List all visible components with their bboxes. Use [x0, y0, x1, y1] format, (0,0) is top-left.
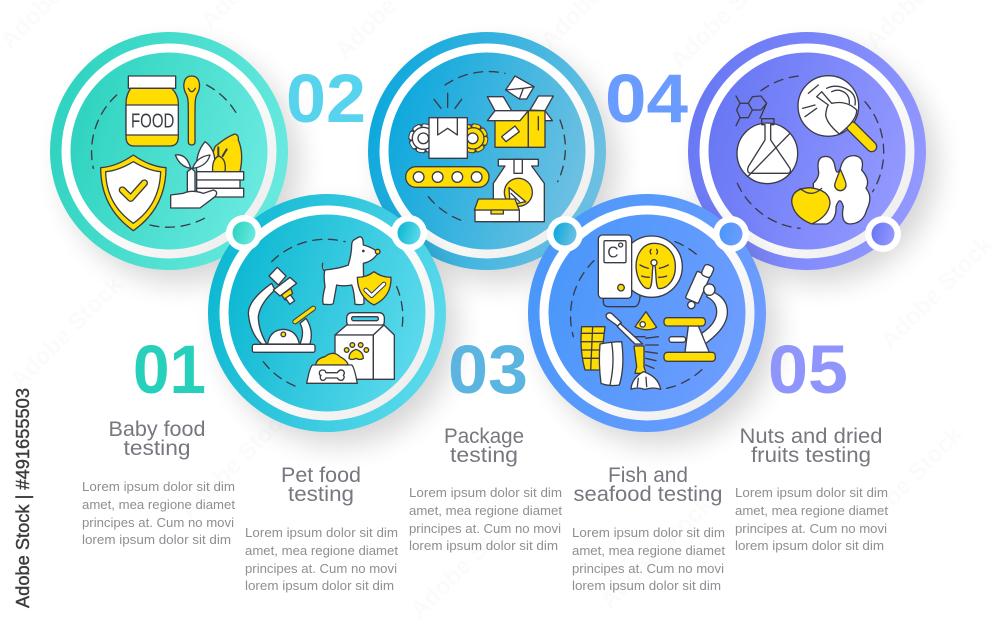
connector dot 2 — [391, 215, 427, 251]
text block: package testing: testing — [450, 443, 518, 467]
text block: pet food testing: Lorem ipsum dolor sit dim — [245, 525, 398, 540]
number 05: 05 — [768, 331, 848, 408]
text block: pet food testing: amet, mea regione diamet — [245, 543, 398, 558]
text block: package testing: principes at. Cum no movi — [409, 521, 561, 536]
text block: fish and seafood testing: seafood testing — [574, 482, 722, 506]
icon group: seafood test: C — [607, 245, 618, 262]
icon group: nuts lab test — [736, 76, 884, 228]
connector dot 5 — [865, 216, 901, 252]
icon group: packaging — [406, 72, 565, 222]
text block: baby food testing: testing — [124, 436, 190, 460]
stock id vertical label: Adobe Stock | #491655503 — [13, 388, 33, 608]
number 02: 02 — [286, 60, 366, 137]
text block: baby food testing: lorem ipsum dolor sit dim — [82, 532, 231, 547]
icon group: food safety — [92, 76, 244, 231]
text block: baby food testing — [82, 417, 235, 547]
text block: package testing: amet, mea regione diamet — [409, 503, 562, 518]
text block: fish and seafood testing: Fish and — [608, 463, 688, 487]
number 04: 04 — [605, 60, 688, 137]
text block: baby food testing: Lorem ipsum dolor sit dim — [82, 479, 235, 494]
panel: circle 02 pet food — [208, 194, 457, 445]
text block: package testing: Lorem ipsum dolor sit dim — [409, 485, 562, 500]
text block: package testing: Package — [444, 424, 524, 448]
text block: package testing: lorem ipsum dolor sit dim — [409, 538, 558, 553]
text block: nuts and dried fruits testing: fruits testing — [751, 443, 871, 467]
connector dot 1 — [226, 215, 262, 251]
text block: nuts and dried fruits testing: Lorem ipsum dolor sit dim — [735, 485, 888, 500]
connector dot 4 — [713, 216, 749, 252]
number 03: 03 — [448, 331, 528, 408]
text block: nuts and dried fruits testing: Nuts and dried — [740, 424, 882, 448]
panel: circle 04 fish and seafood — [528, 194, 777, 445]
text block: fish and seafood testing — [572, 463, 725, 593]
connector dot 3 — [547, 216, 583, 252]
text block: baby food testing: Baby food — [108, 417, 206, 441]
panel: circle 01 baby food — [50, 32, 299, 283]
text block: pet food testing: testing — [288, 482, 354, 506]
text block: pet food testing — [245, 463, 398, 593]
text block: pet food testing: Pet food — [281, 463, 361, 487]
text block: baby food testing: amet, mea regione diamet — [82, 497, 235, 512]
text block: nuts and dried fruits testing: lorem ipsum dolor sit dim — [735, 538, 884, 553]
text block: nuts and dried fruits testing: principes at. Cum no movi — [735, 521, 887, 536]
number 01: 01 — [133, 331, 206, 408]
icon group: food safety: FOOD — [131, 110, 174, 132]
text block: package testing — [409, 424, 562, 553]
text block: fish and seafood testing: lorem ipsum dolor sit dim — [572, 578, 721, 593]
text block: fish and seafood testing: amet, mea regione diamet — [572, 543, 725, 558]
icon group: seafood test — [571, 235, 727, 389]
panel: circle 03 package — [368, 32, 617, 283]
text block: pet food testing: principes at. Cum no movi — [245, 561, 397, 576]
icon group: pet food — [248, 237, 403, 387]
text block: pet food testing: lorem ipsum dolor sit dim — [245, 578, 394, 593]
text block: fish and seafood testing: principes at. Cum no movi — [572, 561, 724, 576]
text block: baby food testing: principes at. Cum no movi — [82, 515, 234, 530]
text block: fish and seafood testing: Lorem ipsum dolor sit dim — [572, 525, 725, 540]
text block: nuts and dried fruits testing — [735, 424, 888, 553]
panel: circle 05 nuts and dried fruits — [688, 32, 937, 283]
text block: nuts and dried fruits testing: amet, mea regione diamet — [735, 503, 888, 518]
